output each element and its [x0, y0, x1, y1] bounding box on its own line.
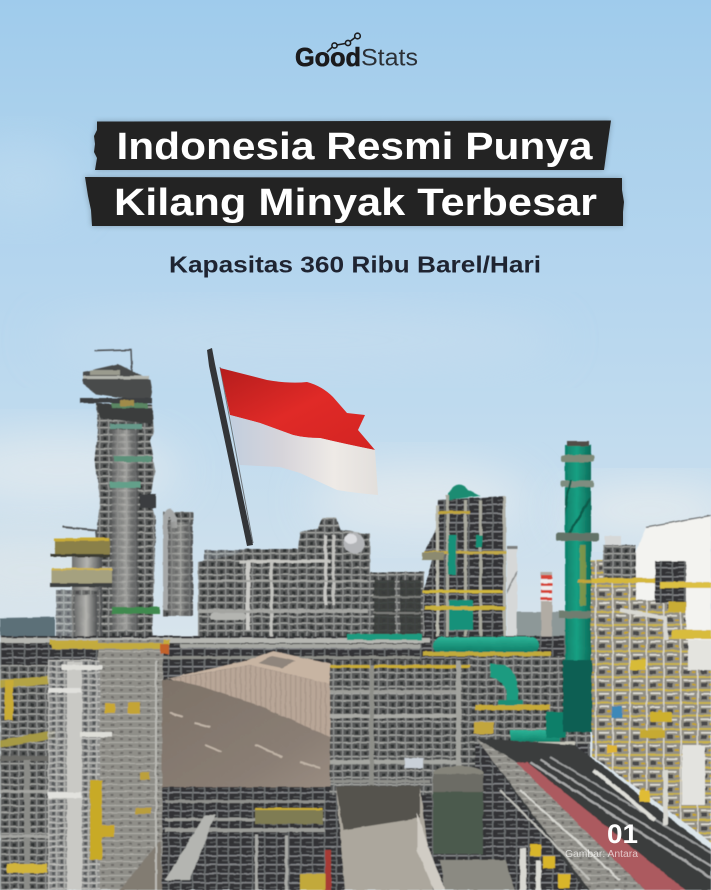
- concrete ground and round tank: [336, 766, 515, 890]
- right complex with white building: [590, 516, 711, 670]
- right lower structure: [592, 640, 711, 842]
- logo: GoodStats: Stats: [361, 44, 418, 72]
- white stack: [507, 546, 517, 640]
- flag white stripe: [230, 415, 378, 495]
- middle process unit with sphere: [198, 518, 370, 642]
- subtitle: Kapasitas 360 Ribu Barel/Hari: [169, 252, 541, 278]
- column beside the tower: [163, 508, 193, 616]
- left lower scaffolding: [0, 665, 55, 890]
- distant hills: [0, 617, 55, 640]
- right process tower with green vessels: [422, 484, 551, 656]
- diagonal pipe rack with red pipes: [476, 738, 711, 890]
- sphere tank: [344, 532, 364, 554]
- refinery photo illustration: [0, 350, 711, 890]
- green stack: [556, 441, 599, 732]
- green elbow pipe and platform: [470, 656, 590, 747]
- central pipe rack area: [330, 660, 475, 795]
- logo: GoodStats: Good: [295, 42, 361, 72]
- lower plant base: [0, 634, 590, 890]
- tall distillation tower: [80, 350, 160, 640]
- flag pole: [207, 348, 253, 546]
- logo: GoodStats: [295, 33, 418, 72]
- small tower with yellow platforms: [50, 527, 112, 640]
- title band 2: black torn tape: [85, 177, 624, 226]
- photo credit: Gambar: Antara: [565, 849, 638, 860]
- logo chart line icon: [327, 33, 360, 52]
- dark vessels: [368, 572, 424, 636]
- structure under the building: [162, 787, 334, 890]
- Indonesian flag: [220, 368, 378, 495]
- main tower lower section: [48, 640, 169, 890]
- red and white striped stack: [541, 572, 552, 642]
- title band 1: black torn tape: Indonesia Resmi Punya: [116, 126, 593, 168]
- flag red stripe: [220, 368, 375, 450]
- page number: 01: [607, 819, 638, 849]
- tan building: [162, 651, 330, 787]
- title band 2: black torn tape: Kilang Minyak Terbesar: [114, 182, 597, 224]
